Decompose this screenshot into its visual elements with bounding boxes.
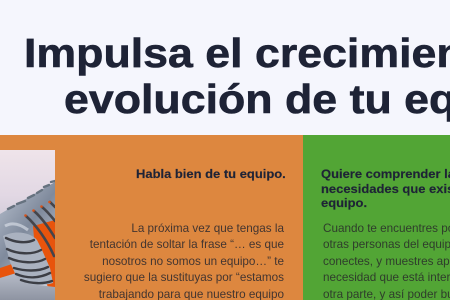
heading: comprender: equipo. — [321, 196, 367, 210]
title — [24, 30, 450, 122]
text: orange body: tentación de soltar la frase “… es que — [90, 238, 284, 251]
text: orange body: nosotros no somos un equipo…” te — [102, 254, 284, 268]
lower body — [0, 272, 55, 300]
heading: comprender — [321, 167, 450, 210]
text: green body — [323, 222, 450, 300]
image: microphone — [0, 150, 55, 300]
panel: green — [303, 135, 450, 300]
heading: habla bien: Habla bien de tu equipo. — [136, 167, 286, 181]
mic body — [0, 182, 55, 300]
text: orange body: La próxima vez que tengas la — [131, 222, 284, 234]
head — [3, 233, 53, 285]
orange reflection — [33, 220, 55, 287]
panel: orange — [0, 135, 303, 300]
text: orange body: sugiero que la sustituyas por “estamos — [84, 271, 284, 284]
text: orange body — [84, 222, 284, 300]
